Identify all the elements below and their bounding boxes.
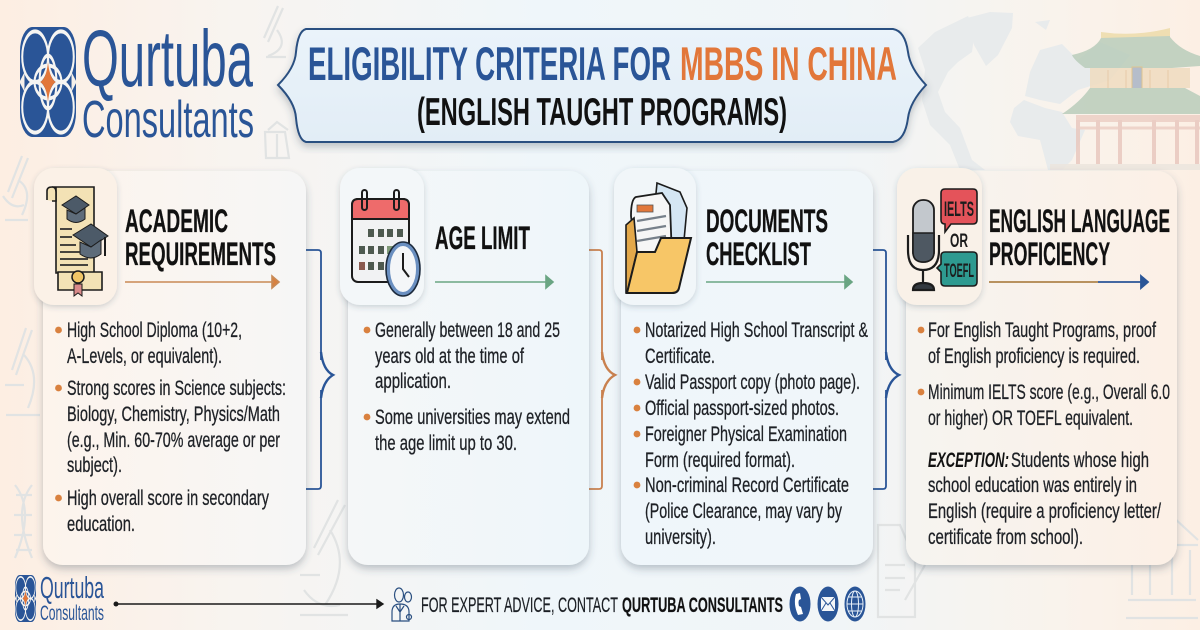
- title banner: [278, 29, 926, 142]
- bullet list: Generally between 18 and 25: [375, 318, 560, 342]
- icon tile: folder with documents: [614, 168, 696, 305]
- bullet list: Form (required format).: [645, 448, 795, 472]
- bullet list: Official passport-sized photos.: [645, 396, 839, 420]
- bullet list: Notarized High School Transcript &: [645, 318, 868, 342]
- bullet list: (e.g., Min. 60-70% average or per: [67, 428, 280, 452]
- icon tile: microphone with IELTS or TOEFL: [897, 168, 982, 305]
- arrow: [125, 276, 279, 288]
- bullet list and exception note: EXCEPTION:: [928, 448, 1009, 472]
- title line 1: ELIGIBILITY CRITERIA FOR: [308, 37, 671, 90]
- icon: email: [818, 586, 838, 622]
- bullet list: Certificate.: [645, 344, 715, 368]
- connector: documents to english: [873, 250, 899, 489]
- icon tile: microphone with IELTS or TOEFL: OR: [950, 231, 968, 252]
- bullet list: Biology, Chemistry, Physics/Math: [67, 402, 280, 426]
- panel: english language proficiency: [897, 168, 1177, 565]
- heading: ACADEMIC: [125, 203, 228, 239]
- footer call to action: FOR EXPERT ADVICE, CONTACT: [421, 594, 618, 617]
- icon tile: calendar and clock: [340, 168, 424, 305]
- bullet list: A-Levels, or equivalent).: [67, 344, 222, 368]
- icon: website globe: [844, 586, 866, 622]
- bullet list: Strong scores in Science subjects:: [67, 376, 286, 400]
- pagoda watermark: [1050, 28, 1200, 170]
- bullet list: (Police Clearance, may vary by: [645, 499, 842, 523]
- panel: academic requirements: [34, 168, 306, 565]
- bullet list: subject).: [67, 453, 122, 477]
- panel: age limit: [340, 168, 589, 565]
- icon tile: diploma and graduation caps: [34, 168, 117, 305]
- logo wordmark: Consultants: [82, 91, 254, 149]
- arrow: [989, 276, 1148, 288]
- bullet list: High overall score in secondary: [67, 486, 269, 510]
- arrow: [435, 276, 553, 288]
- bullet list: Some universities may extend: [375, 405, 570, 429]
- panel: academic requirements: REQUIREMENTS: [125, 236, 276, 272]
- footer call to action: QURTUBA CONSULTANTS: [622, 594, 783, 617]
- icon tile: microphone with IELTS or TOEFL: TOEFL: [944, 261, 974, 282]
- bullet list: Non-criminal Record Certificate: [645, 473, 849, 497]
- arrow: [706, 276, 852, 288]
- bullet list and exception note: certificate from school).: [928, 525, 1083, 549]
- world map watermark: [918, 12, 1130, 170]
- bullet list: application.: [375, 369, 451, 393]
- bullet list: [634, 318, 868, 549]
- bullet list: Valid Passport copy (photo page).: [645, 370, 860, 394]
- bullet list: Foreigner Physical Examination: [645, 422, 847, 446]
- bullet list: [364, 318, 570, 455]
- footer logo: Qurtuba: [40, 570, 104, 605]
- title line 2: (ENGLISH TAUGHT PROGRAMS): [417, 91, 787, 134]
- bullet list: years old at the time of: [375, 344, 524, 368]
- bullet list: the age limit up to 30.: [375, 431, 517, 455]
- bullet list and exception note: [918, 318, 1170, 549]
- heading: DOCUMENTS: [706, 203, 828, 239]
- logo: Qurtuba Consultants: [19, 14, 254, 149]
- icon: phone: [790, 586, 810, 622]
- panel: documents checklist: [614, 168, 873, 565]
- logo wordmark: [82, 14, 254, 149]
- bullet list: [55, 318, 286, 536]
- connector: age to documents: [589, 250, 615, 489]
- title line 1: MBBS IN CHINA: [680, 37, 897, 90]
- icon: advisors: [392, 588, 412, 621]
- logo icon: [19, 27, 77, 137]
- icon tile: microphone with IELTS or TOEFL: IELTS: [944, 198, 974, 221]
- footer logo: [15, 570, 104, 625]
- footer arrow: [114, 600, 383, 608]
- connector: academic to age: [306, 250, 333, 489]
- logo wordmark: Qurtuba: [82, 14, 253, 103]
- footer logo: Consultants: [40, 602, 104, 625]
- bullet list: education.: [67, 512, 135, 536]
- bullet list: High School Diploma (10+2,: [67, 318, 242, 342]
- panel: documents checklist: CHECKLIST: [706, 236, 811, 272]
- bullet list: university).: [645, 525, 716, 549]
- heading: AGE LIMIT: [435, 220, 530, 256]
